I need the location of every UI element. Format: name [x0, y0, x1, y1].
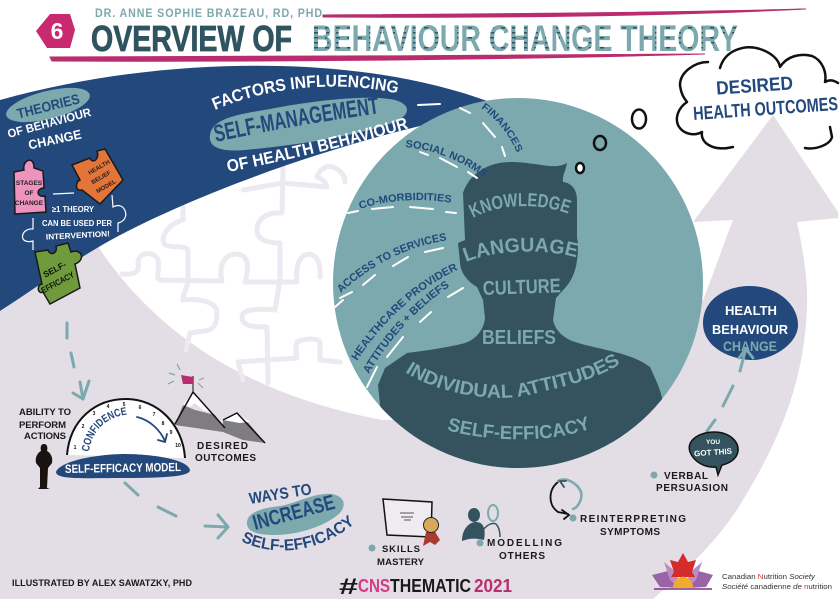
hashtag: # — [339, 574, 358, 599]
health behaviour change bubble: BEHAVIOUR — [712, 322, 789, 337]
icon: modelling others — [462, 505, 500, 541]
label: reinterpreting symptoms — [570, 514, 686, 538]
words inside head: KNOWLEDGE — [468, 193, 572, 218]
logo: canadian nutrition society: Canadian Nutrition Society — [722, 574, 816, 581]
puzzle piece: stages of change: CHANGE — [15, 200, 44, 207]
title underline bottom — [50, 54, 705, 61]
words inside head: CULTURE — [482, 275, 561, 300]
page number badge — [36, 14, 75, 48]
speech bubble: you got this — [689, 432, 738, 475]
self-efficacy model banner — [56, 454, 190, 478]
label: reinterpreting symptoms: SYMPTOMS — [600, 527, 660, 538]
ways to increase self-efficacy: SELF-EFFICACY — [242, 514, 352, 550]
theory note: INTERVENTION! — [46, 229, 110, 242]
puzzle piece: health belief model — [72, 149, 123, 204]
self-efficacy model banner: SELF-EFFICACY MODEL — [65, 460, 181, 476]
label: verbal persuasion — [650, 471, 728, 494]
cloud: desired health outcomes: DESIRED — [715, 73, 794, 100]
ways to increase self-efficacy: WAYS TO — [248, 481, 313, 508]
label: reinterpreting symptoms: REINTERPRETING — [580, 514, 686, 525]
label: modelling others: MODELLING — [487, 538, 562, 549]
factors heading — [210, 74, 408, 172]
factors heading: FACTORS INFLUENCING — [211, 74, 398, 110]
ways to increase self-efficacy: INCREASE — [250, 491, 337, 535]
factor labels: HEALTHCARE PROVIDER — [351, 264, 458, 360]
large teal circle — [333, 98, 703, 468]
hashtag: CNS — [358, 576, 390, 596]
factors heading: OF HEALTH BEHAVIOUR — [227, 118, 408, 172]
puzzle piece: stages of change: STAGES — [16, 180, 43, 187]
mountains and flag — [168, 364, 265, 443]
label: skills mastery: MASTERY — [377, 557, 425, 568]
theories heading: OF BEHAVIOUR — [6, 105, 93, 141]
theories heading: CHANGE — [27, 126, 83, 152]
confidence dome: 7 — [153, 412, 156, 418]
theory note: ≥1 THEORY — [52, 205, 95, 214]
health behaviour change bubble: HEALTH — [725, 303, 777, 318]
words inside head: INDIVIDUAL ATTITUDES — [406, 354, 618, 398]
icon: person — [36, 444, 52, 489]
title underline top — [323, 9, 806, 17]
confidence dome: 8 — [162, 421, 165, 427]
confidence dome: 6 — [139, 405, 142, 411]
theory note: CAN BE USED PER — [42, 219, 112, 228]
factor labels: SOCIAL NORMS — [406, 140, 487, 176]
health behaviour change bubble: CHANGE — [723, 338, 777, 354]
factor labels: CO-MORBIDITIES — [359, 192, 452, 208]
blue band: factors and theories — [0, 66, 490, 311]
puzzle piece: health belief model: HEALTH — [88, 160, 111, 177]
confidence dome: 4 — [107, 404, 110, 410]
ability label — [19, 407, 71, 442]
hashtag — [339, 574, 512, 599]
words inside head: LANGUAGE — [462, 238, 578, 262]
confidence dome: 1 — [74, 445, 77, 451]
speech bubble: you got this: YOU — [706, 439, 720, 446]
page number badge: 6 — [51, 18, 63, 44]
health behaviour change bubble — [703, 286, 798, 360]
illustrator credit: ILLUSTRATED BY ALEX SAWATZKY, PHD — [12, 578, 192, 588]
dashed arrow: model to ways — [125, 483, 228, 538]
puzzle piece: health belief model: MODEL — [96, 179, 118, 195]
confidence dome: 5 — [123, 402, 126, 408]
logo: canadian nutrition society: Société canadienne de nutrition — [722, 584, 832, 591]
theories heading: THEORIES — [15, 90, 81, 121]
label: desired outcomes: DESIRED — [197, 441, 248, 452]
puzzle piece: self-efficacy — [35, 243, 82, 304]
puzzle piece: health belief model: BELIEF — [91, 170, 113, 186]
ability label: ACTIONS — [24, 431, 66, 442]
label: modelling others — [476, 538, 562, 562]
label: skills mastery: SKILLS — [382, 544, 420, 555]
label: skills mastery — [368, 544, 425, 568]
confidence dome — [66, 398, 186, 458]
factor labels: ACCESS TO SERVICES — [338, 233, 446, 293]
puzzle piece: stages of change — [14, 160, 46, 214]
confidence dome: 3 — [93, 411, 96, 417]
dashed arrow: puzzle to model — [67, 323, 89, 399]
title: overview of: OVERVIEW OF — [91, 18, 292, 59]
head and shoulders silhouette — [378, 162, 662, 468]
ways to increase self-efficacy — [242, 481, 352, 550]
factor labels — [338, 103, 522, 374]
icon: reinterpreting cycle — [550, 479, 581, 519]
label: verbal persuasion: VERBAL — [664, 471, 708, 482]
ability label: ABILITY TO — [19, 407, 71, 418]
label: verbal persuasion: PERSUASION — [656, 483, 728, 494]
icon: certificate and ribbon — [383, 499, 440, 546]
puzzle piece outlines — [122, 166, 345, 383]
confidence dome: 10 — [175, 443, 181, 449]
confidence dome: 9 — [170, 430, 173, 436]
puzzle piece: self-efficacy: EFFICACY — [39, 269, 76, 295]
theories heading — [3, 81, 93, 152]
confidence dome: CONFIDENCE — [82, 407, 127, 451]
words inside head: BELIEFS — [482, 327, 556, 349]
thought bubbles — [576, 110, 646, 173]
label: desired outcomes — [195, 441, 256, 464]
factor labels: ATTITUDES + BELIEFS — [364, 281, 448, 374]
words inside head — [406, 193, 618, 440]
label: desired outcomes: OUTCOMES — [195, 453, 256, 464]
label: modelling others: OTHERS — [499, 551, 545, 562]
factor labels: FINANCES — [482, 103, 522, 152]
author line: DR. ANNE SOPHIE BRAZEAU, RD, PHD — [95, 6, 323, 20]
puzzle piece: self-efficacy: SELF- — [41, 259, 68, 280]
ability label: PERFORM — [19, 420, 66, 431]
cloud: desired health outcomes — [677, 47, 839, 148]
logo: canadian nutrition society — [652, 553, 832, 591]
factors heading: SELF-MANAGEMENT — [214, 98, 378, 142]
words inside head: SELF-EFFICACY — [448, 416, 587, 440]
hashtag: THEMATIC — [390, 576, 471, 596]
hashtag: 2021 — [474, 576, 512, 596]
puzzle piece: stages of change: OF — [24, 190, 34, 197]
connecting puzzle outlines — [22, 193, 126, 250]
dashed arrow to behaviour change — [707, 349, 753, 431]
road dashes between factors — [335, 104, 505, 387]
speech bubble: you got this: GOT THIS — [694, 447, 733, 458]
confidence dome: 2 — [82, 424, 85, 430]
theory note — [42, 205, 112, 242]
